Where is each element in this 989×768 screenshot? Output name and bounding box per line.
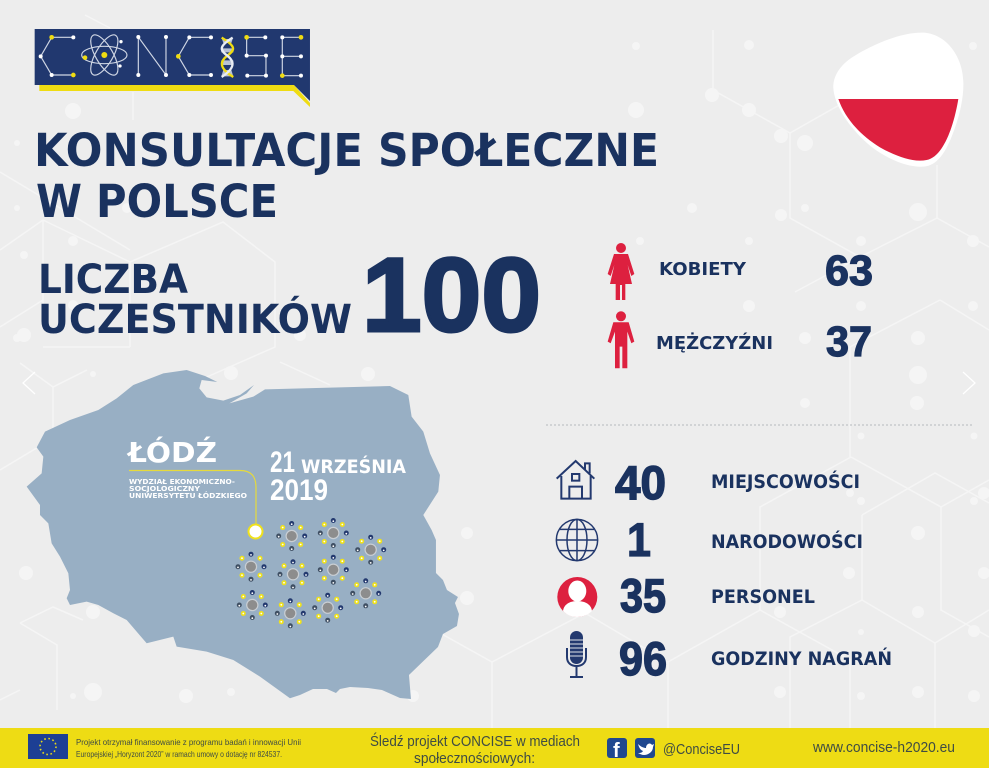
city: Łódź: ŁÓDŹ	[126, 435, 217, 469]
date: 21	[270, 446, 295, 479]
icon: EU flag	[28, 734, 68, 759]
date: WRZEŚNIA	[301, 454, 406, 478]
icon: Facebook	[607, 738, 627, 762]
icon: Facebook: f	[613, 740, 620, 762]
map of Poland	[27, 370, 459, 699]
venue	[129, 478, 247, 500]
social media prompt	[370, 732, 580, 767]
Twitter handle: @ConciseEU	[663, 741, 740, 758]
number: nationalities: 1	[627, 513, 651, 566]
icon: man	[608, 311, 634, 368]
participant clusters	[236, 518, 386, 628]
social media prompt: społecznościowych:	[414, 750, 535, 767]
number: men: 37	[826, 318, 872, 366]
funding note: Projekt otrzymał finansowanie z programu badań i innowacji Unii	[76, 737, 301, 747]
number: recording hours: 96	[619, 632, 667, 685]
arrow: previous	[23, 372, 35, 394]
date	[270, 446, 406, 507]
flag of Poland	[833, 33, 963, 167]
number: localities: 40	[615, 456, 666, 509]
arrow: next	[963, 372, 975, 394]
logo: CONCISE	[35, 29, 310, 107]
title: POLSCE	[96, 175, 278, 228]
icon: woman	[608, 243, 634, 300]
footer bar	[0, 728, 989, 768]
title: W	[36, 175, 82, 228]
venue: UNIWERSYTETU ŁÓDZKIEGO	[129, 491, 247, 500]
title: KONSULTACJE	[34, 124, 363, 177]
connector line and Łódź marker	[129, 470, 262, 538]
label: recording hours: GODZINY NAGRAŃ	[711, 648, 892, 670]
participants number: 100	[362, 237, 541, 354]
participants heading: UCZESTNIKÓW	[38, 295, 352, 343]
label: nationalities: NARODOWOŚCI	[711, 531, 863, 553]
funding note	[76, 737, 301, 759]
number: staff: 35	[620, 569, 666, 622]
website: www.concise-h2020.eu	[812, 739, 955, 756]
label: staff: PERSONEL	[711, 587, 815, 608]
funding note: Europejskiej „Horyzont 2020” w ramach umowy o dotację nr 824537.	[76, 749, 282, 759]
participants heading: LICZBA	[38, 257, 188, 303]
label: localities: MIEJSCOWOŚCI	[711, 471, 860, 493]
social media prompt: Śledź projekt CONCISE w mediach	[370, 732, 580, 750]
icon: microphone	[567, 631, 586, 677]
title	[34, 124, 659, 228]
venue: SOCJOLOGICZNY	[129, 485, 200, 493]
icon: person	[557, 577, 597, 617]
label: women: KOBIETY	[659, 260, 746, 280]
icon: Twitter	[635, 738, 655, 758]
icon: house	[557, 461, 594, 499]
number: women: 63	[825, 247, 873, 295]
icon: globe	[556, 519, 598, 561]
date: 2019	[270, 474, 328, 507]
venue: WYDZIAŁ EKONOMICZNO-	[129, 478, 235, 486]
participants heading	[38, 257, 352, 343]
label: men: MĘŻCZYŹNI	[656, 332, 773, 354]
title: SPOŁECZNE	[378, 124, 659, 177]
